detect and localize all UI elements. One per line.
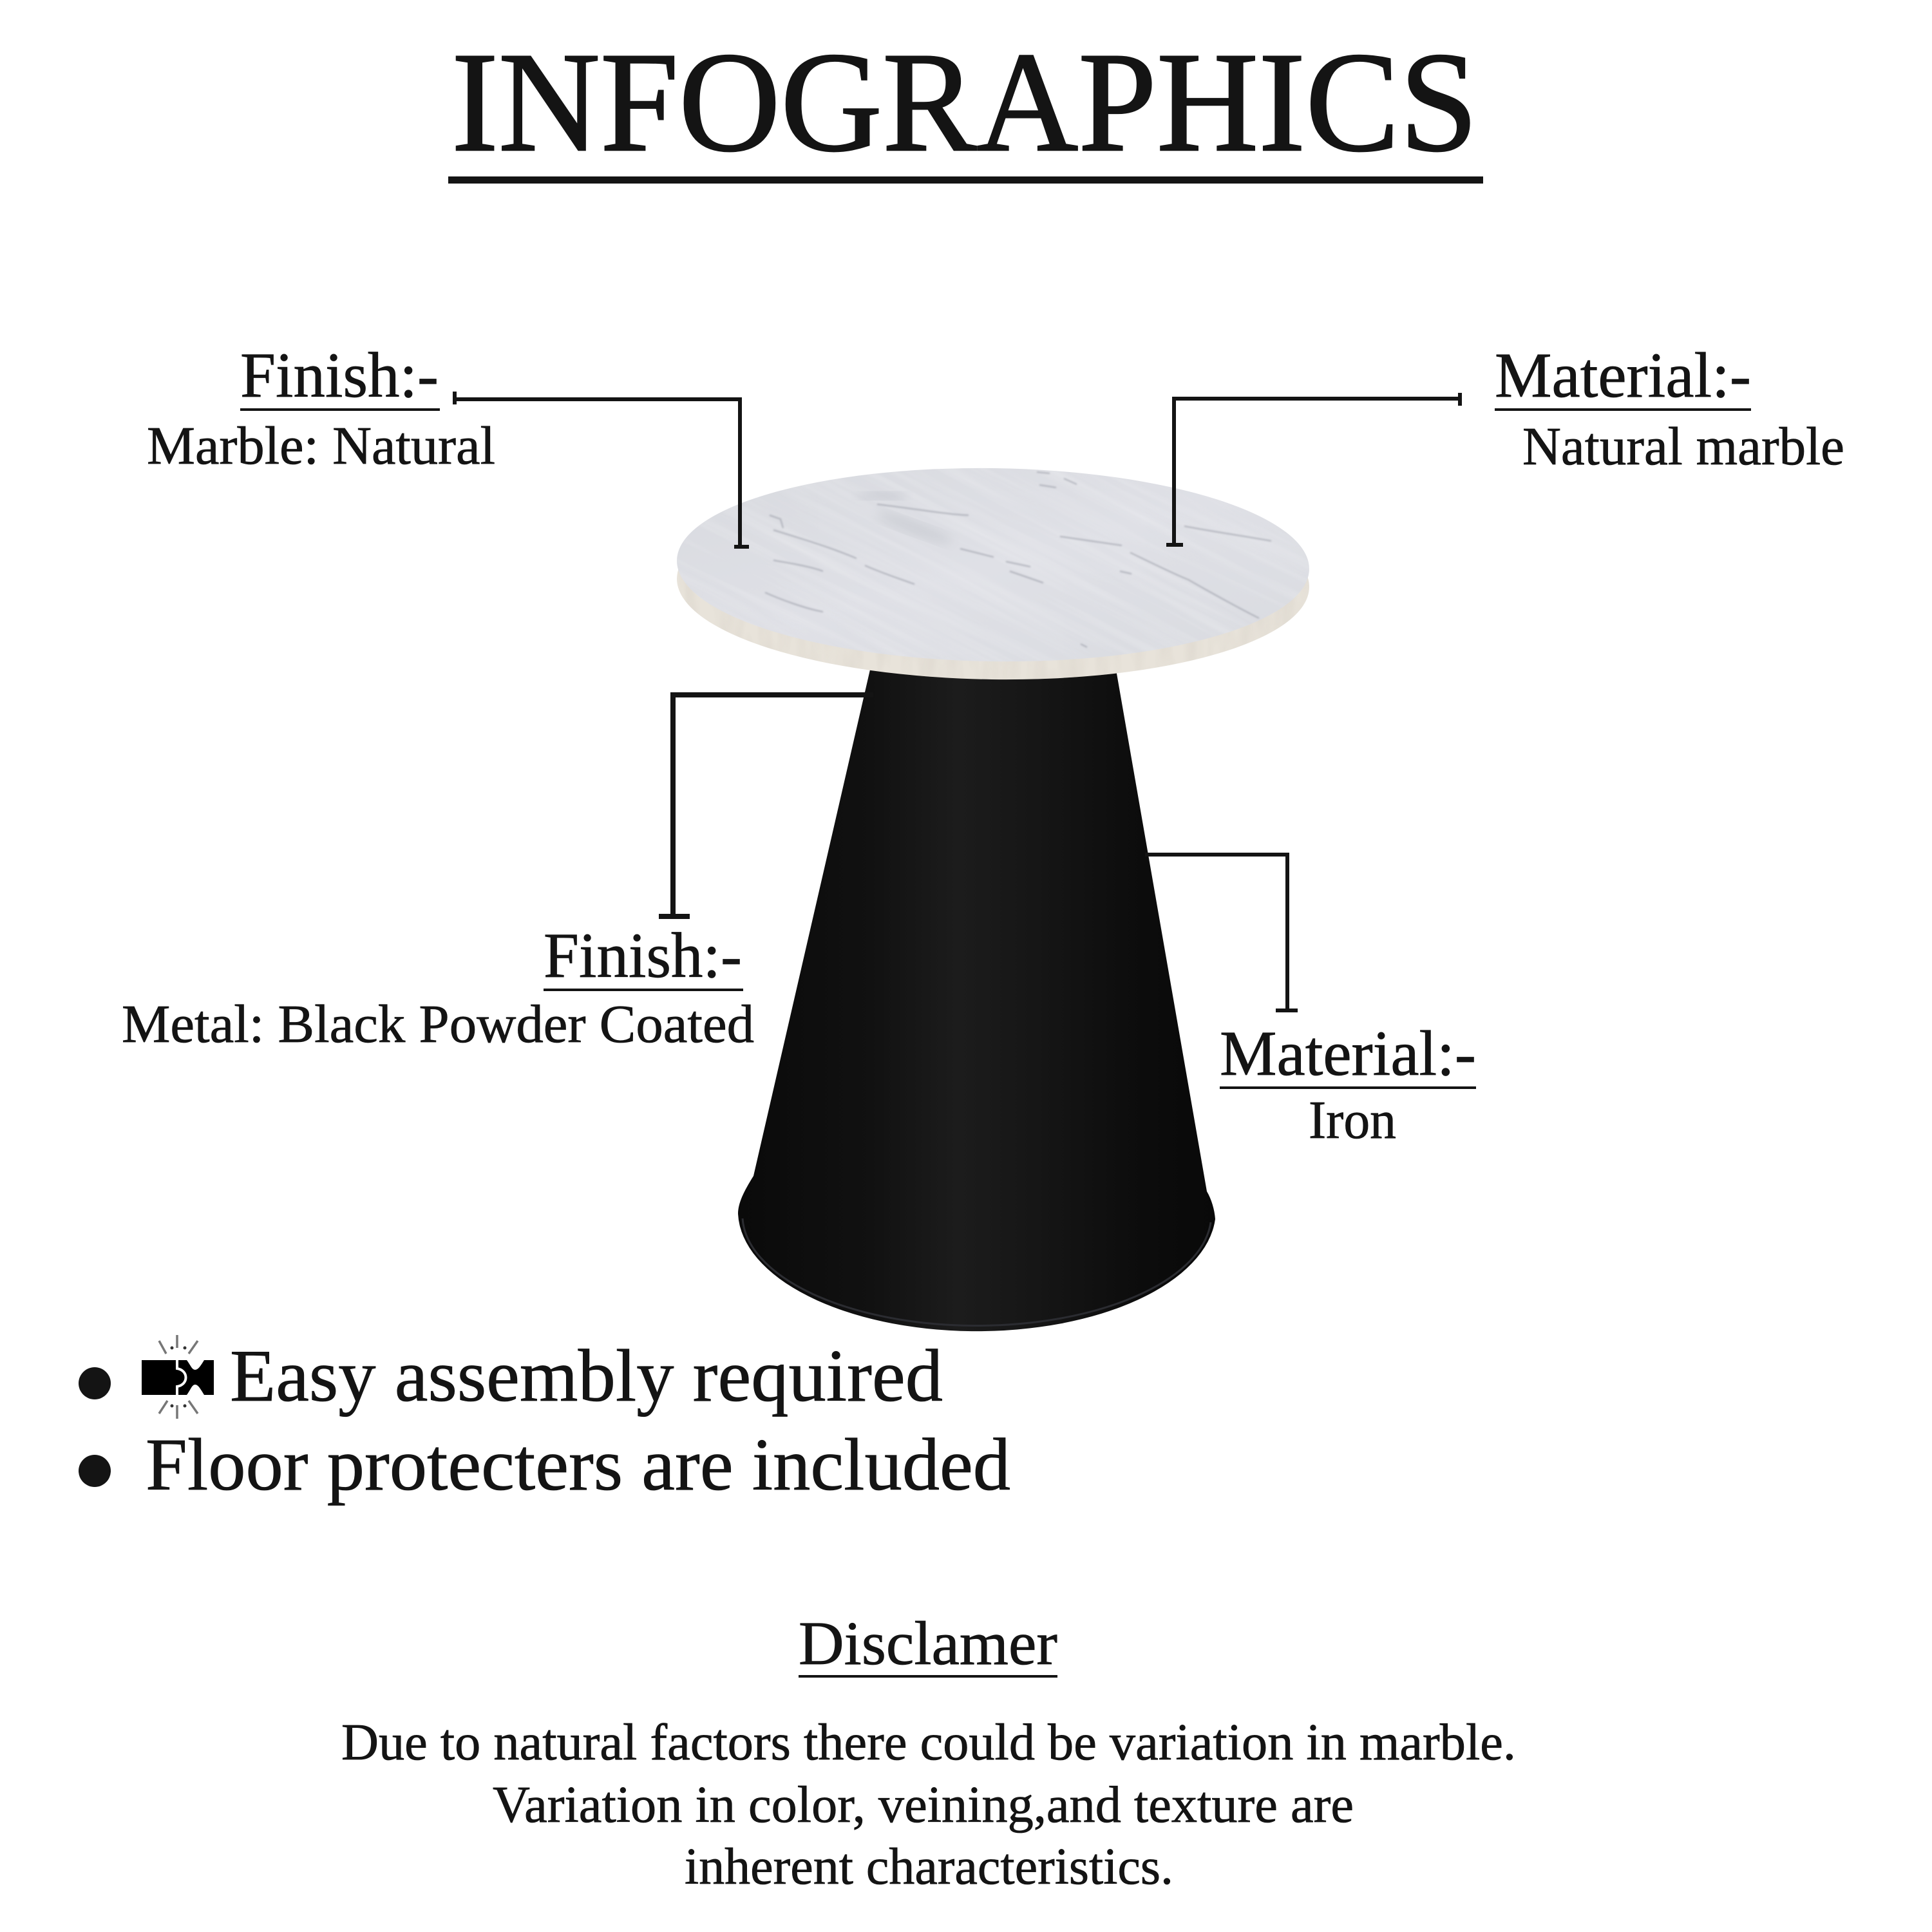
disclaimer text: Variation in color, veining,and texture are [493, 1776, 1354, 1833]
bullet: floor protectors: Floor protecters are included [146, 1424, 1010, 1506]
label: material iron [1220, 1018, 1476, 1150]
label: finish marble: Finish:- [240, 339, 439, 411]
product photo: marble table with black cone base [79, 468, 1309, 1485]
label: finish metal [122, 920, 754, 1054]
label: finish metal: Metal: Black Powder Coated [122, 994, 754, 1054]
leader line: mid left finish [659, 695, 873, 916]
label: finish metal: Finish:- [544, 920, 742, 991]
label: material iron: Iron [1309, 1090, 1396, 1150]
leader line: top left finish [455, 392, 749, 547]
cone base [738, 670, 1215, 1331]
bullet: easy assembly: Easy assembly required [230, 1335, 943, 1417]
label: material marble: Material:- [1495, 339, 1751, 411]
disclaimer text: Due to natural factors there could be variation in marble. [341, 1713, 1516, 1771]
label: material marble: Natural marble [1522, 417, 1844, 477]
label: material iron: Material:- [1220, 1018, 1476, 1089]
icon: puzzle pieces [142, 1335, 214, 1419]
title: INFOGRAPHICS [451, 23, 1478, 182]
label: material marble [1495, 339, 1844, 477]
label: finish marble: Marble: Natural [147, 416, 495, 476]
table top edge [677, 570, 1309, 680]
table top surface [677, 468, 1309, 661]
base rim highlight [743, 1218, 1211, 1326]
disclaimer heading: Disclamer [799, 1609, 1057, 1678]
disclaimer text: inherent characteristics. [685, 1837, 1173, 1895]
leader line: right material [1145, 855, 1298, 1010]
marble veins [765, 472, 1271, 647]
disclaimer text [341, 1713, 1516, 1895]
label: finish marble [147, 339, 495, 476]
leader line: top right material [1166, 393, 1460, 545]
